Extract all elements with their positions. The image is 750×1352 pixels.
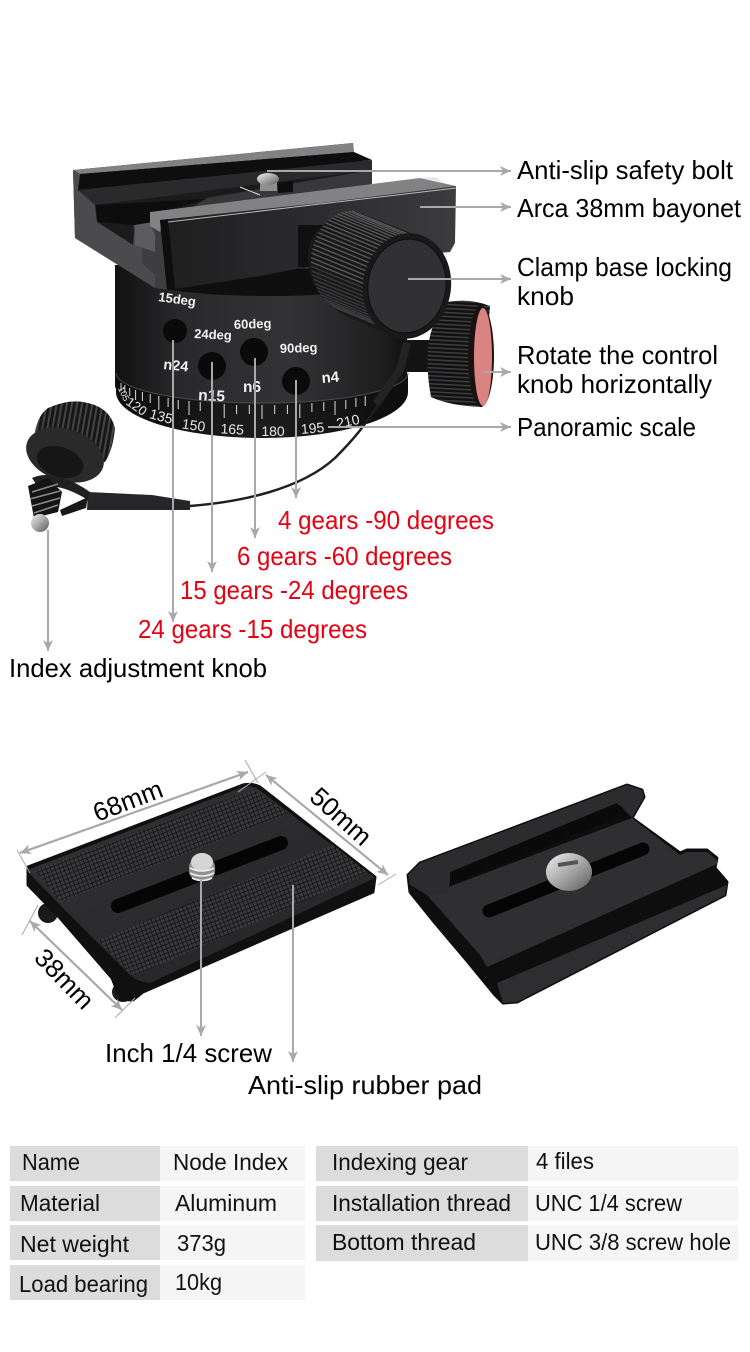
gear labels in red: 15 gears -24 degrees — [180, 575, 408, 605]
dimension labels: 50mm — [304, 781, 378, 852]
plate pegs — [38, 903, 134, 1002]
gear labels in red: 24 gears -15 degrees — [138, 614, 367, 644]
scale numbers: 120 — [123, 394, 150, 419]
plate outline — [408, 785, 727, 1003]
rear clamp rail — [73, 143, 372, 292]
feature labels: right side: knob horizontally — [517, 369, 712, 399]
anti-slip safety bolt — [240, 173, 293, 195]
lower lip — [497, 885, 727, 1003]
specification table: left: 373g — [177, 1230, 226, 1256]
feature labels: right side: Arca 38mm bayonet — [517, 193, 742, 223]
feature labels: right side: Rotate the control — [517, 340, 718, 370]
engraved degree labels: n24 — [163, 357, 189, 376]
mode holes — [163, 319, 310, 395]
feature labels: right side: Anti-slip safety bolt — [517, 155, 734, 185]
engraved degree labels: n4 — [321, 368, 340, 387]
plate body — [28, 784, 375, 1000]
right control knob — [406, 301, 494, 407]
plate top face — [30, 786, 375, 983]
dimension labels — [29, 774, 378, 1015]
specification table: left: Net weight — [20, 1231, 130, 1257]
specification table: left: Load bearing — [19, 1271, 148, 1297]
engraved degree labels: n6 — [243, 379, 261, 396]
specification table: right: Indexing gear — [332, 1149, 468, 1175]
callout arrows: plate — [201, 880, 293, 1062]
scale numbers: 195 — [300, 419, 325, 437]
feature labels: right side: Clamp base locking — [517, 252, 732, 282]
dimension lines — [17, 760, 396, 1018]
plate slot — [118, 843, 281, 906]
scale numbers: 150 — [181, 416, 207, 435]
panel: quick release plate underside view — [408, 785, 727, 1003]
dimension labels: 68mm — [89, 774, 167, 828]
index adjustment knob with cable — [19, 343, 407, 532]
clamp base locking knob — [298, 211, 458, 345]
scale numbers: 180 — [261, 423, 285, 439]
scale numbers: 105 — [116, 385, 131, 403]
specification table: right: Bottom thread — [332, 1229, 476, 1255]
engraved degree labels: 60deg — [234, 316, 272, 332]
panel: quick release plate top view — [28, 784, 375, 1002]
engraved degree labels: 24deg — [194, 326, 232, 343]
gear labels in red: 6 gears -60 degrees — [237, 541, 452, 571]
plate face — [427, 818, 717, 967]
round head screw — [546, 853, 592, 891]
feature labels: right side — [517, 155, 742, 442]
label: inch 1/4 screw: Inch 1/4 screw — [105, 1038, 272, 1068]
gear labels in red — [138, 505, 494, 644]
specification table: left: 10kg — [175, 1269, 222, 1295]
callout arrows: index head — [48, 171, 511, 651]
knurled rubber pad lower — [98, 845, 368, 977]
front clamp bar — [150, 177, 456, 290]
gear labels in red: 4 gears -90 degrees — [278, 505, 494, 535]
rail recess top — [450, 803, 630, 885]
specification table: right: 4 files — [536, 1148, 594, 1174]
scale numbers: 165 — [220, 420, 245, 438]
specification table: left: Aluminum — [175, 1190, 277, 1216]
inch 1/4 screw — [189, 853, 215, 880]
specification table: right: Installation thread — [332, 1190, 511, 1216]
panel: index head product photo — [19, 143, 494, 532]
engraved degree labels: 15deg — [158, 289, 197, 309]
label: index adjustment knob: Index adjustment knob — [9, 653, 267, 683]
scale numbers: 210 — [335, 411, 361, 431]
label: anti-slip rubber pad: Anti-slip rubber pad — [248, 1070, 482, 1100]
scale numbers: 135 — [148, 405, 175, 427]
upper raised rail — [408, 785, 644, 895]
specification table: left: Node Index — [173, 1149, 288, 1175]
specification table: left — [10, 1146, 305, 1300]
plate slot — [489, 849, 643, 911]
specification table: right — [316, 1146, 738, 1261]
specification table: left: Name — [22, 1149, 80, 1175]
engraved degree labels: n15 — [198, 387, 226, 405]
specification table: right: UNC 3/8 screw hole — [535, 1229, 731, 1255]
scale numbers — [116, 385, 361, 439]
specification table: right: UNC 1/4 screw — [535, 1190, 682, 1216]
feature labels: right side: Panoramic scale — [517, 412, 696, 442]
engraved degree labels: 90deg — [280, 340, 318, 356]
specification table: left: Material — [20, 1190, 100, 1216]
dimension labels: 38mm — [29, 942, 100, 1015]
knurled rubber pad upper — [35, 790, 290, 902]
engraved degree labels — [158, 289, 340, 405]
feature labels: right side: knob — [517, 281, 574, 311]
index body cylinder — [115, 265, 408, 438]
